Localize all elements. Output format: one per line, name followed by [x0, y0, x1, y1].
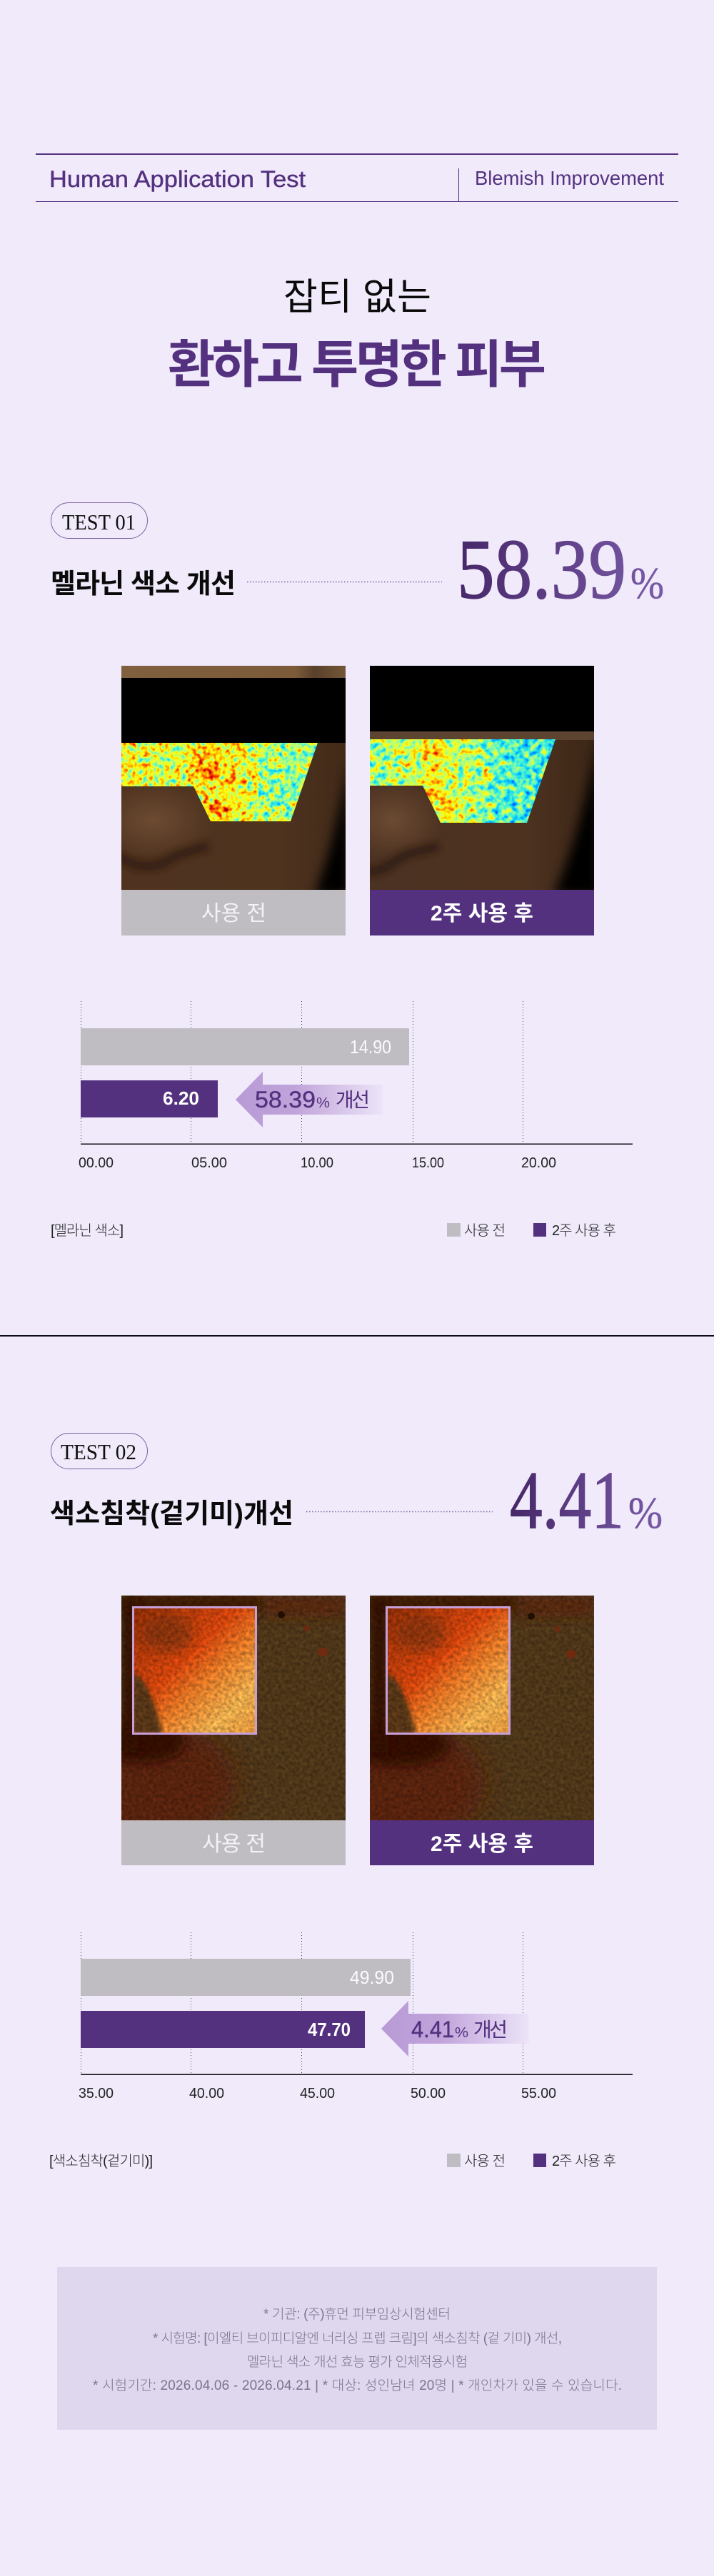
bar: before 49.90: 49.90 — [350, 1967, 394, 1988]
arrow: 4.41% improvement — [381, 2001, 529, 2057]
label: after: 2주 사용 후 — [431, 1832, 533, 1856]
melanin heatmap after — [370, 739, 555, 823]
panel: test notes: 멜라닌 색소 개선 효능 평가 인체적용시험 — [247, 2354, 468, 2370]
axis labels: 20.00 — [521, 1155, 556, 1171]
label: before: 사용 전 — [202, 1832, 266, 1856]
bar: before 14.90: 14.90 — [350, 1036, 391, 1058]
badge: test 01 — [51, 502, 147, 538]
legend: melanin — [51, 1222, 616, 1239]
label: before — [121, 890, 346, 935]
title: 잡티 없는 — [283, 277, 431, 318]
legend: pigment deposition: [색소침착(겉기미)] — [49, 2153, 153, 2169]
nose — [121, 793, 197, 849]
panel: test 02 heading — [50, 1433, 663, 1546]
arrow: 58.39% improvement: 개선 — [336, 1089, 370, 1111]
photo: before — [121, 666, 346, 890]
axis labels — [79, 1155, 556, 1171]
badge: test 02 — [51, 1433, 147, 1469]
bar: after 6.20 — [81, 1080, 218, 1117]
arrow: 4.41% improvement: 4.41 — [411, 2017, 454, 2042]
panel: test 01 heading — [51, 502, 664, 617]
stat: 4.41%: 4.41 — [510, 1455, 624, 1546]
header bar — [36, 153, 678, 202]
axis labels: 15.00 — [412, 1155, 444, 1171]
arrow: 4.41% improvement: % — [455, 2025, 468, 2041]
bar chart: pigment deposition — [79, 1932, 633, 2101]
melanin heatmap before — [121, 743, 318, 821]
nose — [370, 792, 430, 849]
legend: melanin: [멜라닌 색소] — [51, 1222, 124, 1239]
title: 환하고 투명한 피부 — [168, 337, 546, 394]
axis labels: 05.00 — [191, 1155, 227, 1171]
label: before — [121, 1820, 346, 1865]
header bar: Blemish Improvement — [475, 167, 664, 189]
highlighted skin area — [386, 1606, 511, 1735]
heading: melanin: 멜라닌 색소 개선 — [51, 569, 236, 599]
bar: after 47.70 — [81, 2011, 365, 2048]
badge: test 01: TEST 01 — [62, 509, 136, 534]
axis labels: 10.00 — [301, 1155, 333, 1171]
axis labels — [79, 2086, 556, 2101]
title — [168, 277, 546, 394]
photo: after — [370, 666, 594, 890]
arrow: 4.41% improvement: 개선 — [473, 2019, 508, 2041]
photo: after — [370, 1596, 594, 1820]
label: after — [370, 1820, 594, 1865]
bar: after 47.70: 47.70 — [308, 2019, 351, 2040]
legend: melanin: 2주 사용 후 — [552, 1222, 616, 1239]
arrow: 58.39% improvement — [236, 1072, 383, 1127]
axis labels: 50.00 — [411, 2086, 446, 2101]
badge: test 02: TEST 02 — [61, 1439, 136, 1464]
panel: melanin photos — [93, 666, 600, 935]
bar: after 6.20: 6.20 — [163, 1087, 199, 1109]
arrow: 58.39% improvement: 58.39 — [255, 1087, 316, 1112]
axis labels: 40.00 — [189, 2086, 224, 2101]
legend: pigment deposition: 사용 전 — [464, 2153, 506, 2169]
label: after — [370, 890, 594, 935]
legend: pigment deposition: 2주 사용 후 — [552, 2153, 616, 2169]
panel: test notes: * 시험명: [이엘티 브이피디알엔 너리싱 프렙 크림]의 색소침착 (겉 기미) 개선, — [153, 2331, 562, 2346]
stat: 58.39%: % — [630, 559, 664, 608]
bar: before 49.90 — [81, 1959, 411, 1996]
highlighted skin area — [132, 1606, 257, 1735]
arrow: 58.39% improvement: % — [316, 1095, 330, 1111]
stat: 58.39%: 58.39 — [457, 522, 626, 617]
header bar: Human Application Test — [49, 166, 306, 192]
bar chart: melanin — [79, 1001, 633, 1171]
bar: before 14.90 — [81, 1028, 409, 1065]
panel: test notes — [57, 2267, 657, 2430]
panel: test notes: * 기관: (주)휴먼 피부임상시험센터 — [263, 2306, 451, 2322]
heading: pigment deposition: 색소침착(겉기미)개선 — [50, 1499, 293, 1529]
legend: pigment deposition — [49, 2153, 616, 2169]
panel: test notes: * 시험기간: 2026.04.06 - 2026.04.21 | * 대상: 성인남녀 20명 | * 개인차가 있을 수 있습니다. — [93, 2378, 622, 2393]
label: before: 사용 전 — [201, 902, 266, 926]
photo: before — [121, 1596, 346, 1820]
axis labels: 35.00 — [79, 2086, 114, 2101]
axis labels: 45.00 — [300, 2086, 335, 2101]
section divider — [0, 1335, 714, 1337]
axis labels: 00.00 — [79, 1155, 114, 1171]
stat: 4.41%: % — [628, 1489, 663, 1538]
legend: melanin: 사용 전 — [464, 1222, 506, 1239]
axis labels: 55.00 — [521, 2086, 556, 2101]
panel: pigment photos — [121, 1596, 594, 1865]
label: after: 2주 사용 후 — [431, 902, 533, 926]
